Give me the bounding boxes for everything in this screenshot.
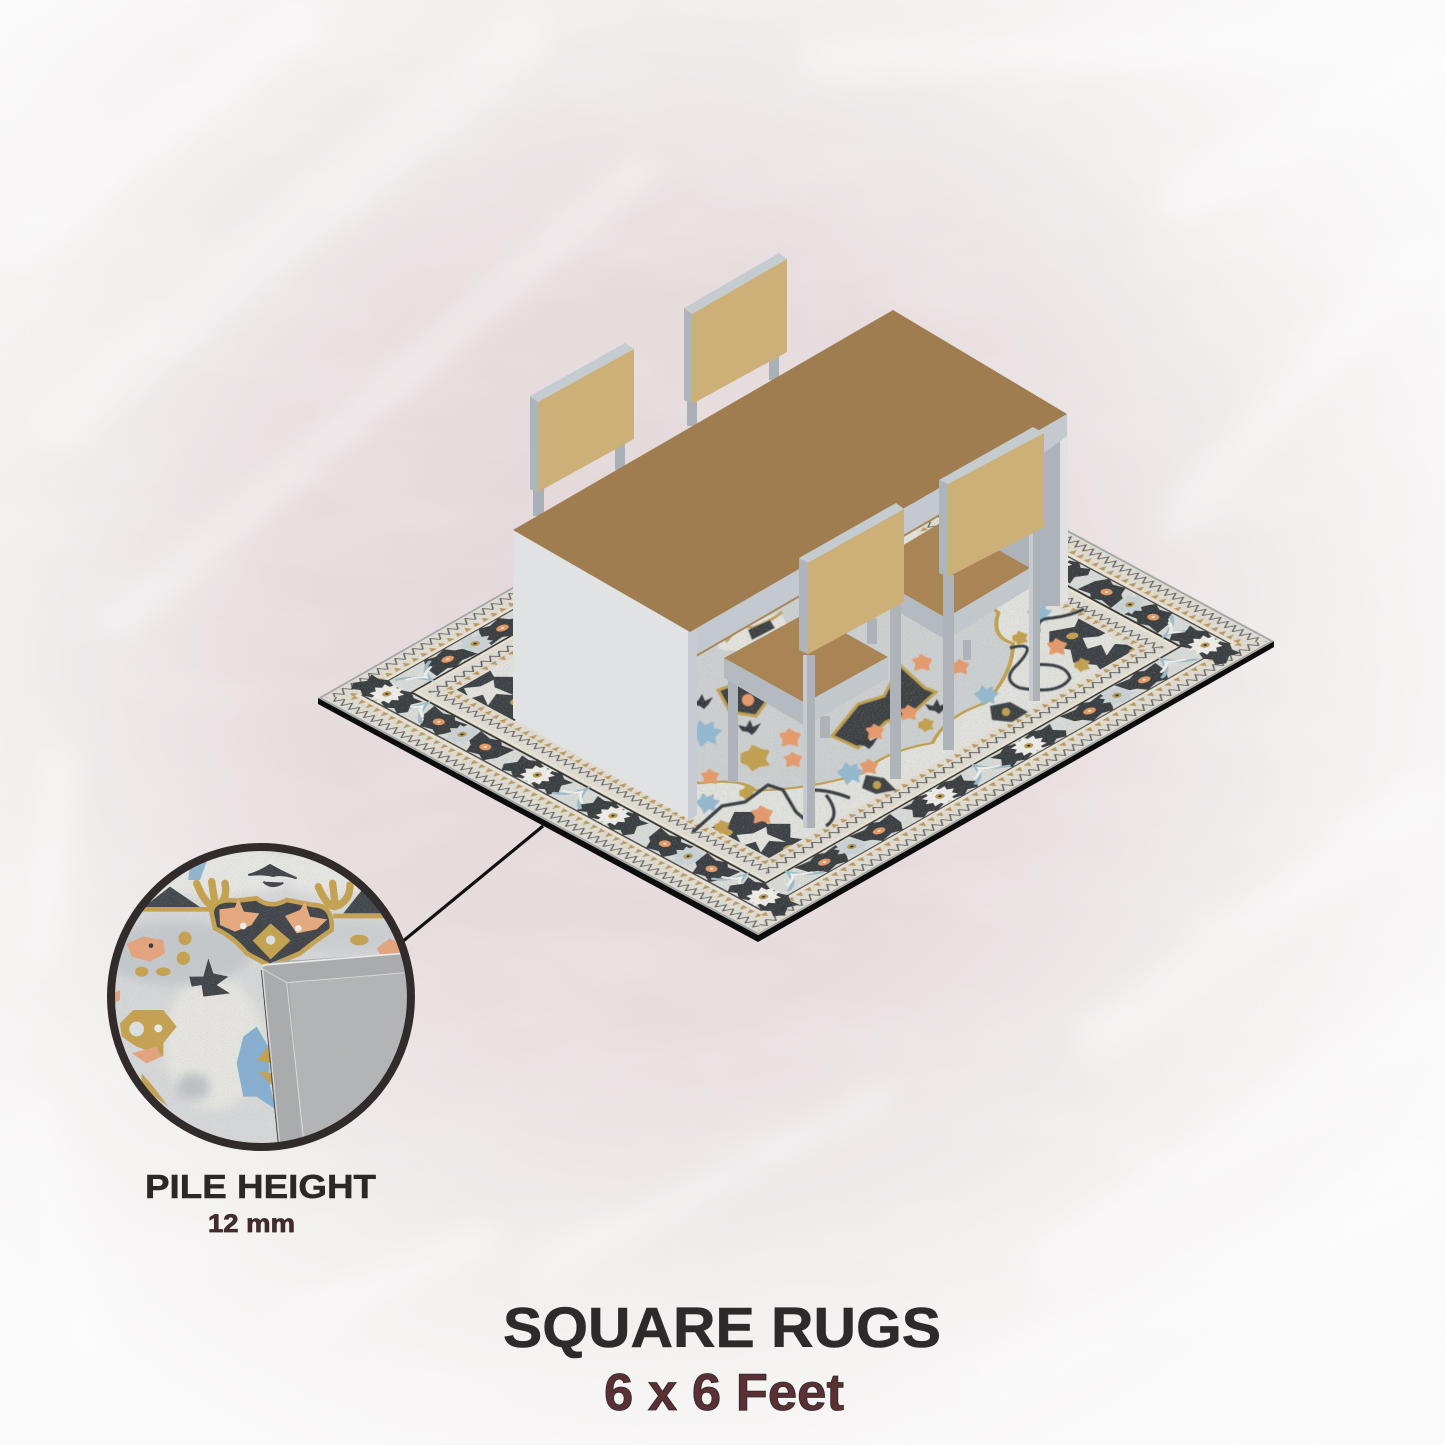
chair: back left (530, 343, 634, 516)
circle pile base (115, 852, 386, 1143)
circle florals (127, 937, 165, 962)
circle central medallion (212, 898, 332, 966)
subtitle: dimensions: 6 x 6 Feet (604, 1364, 844, 1422)
connector line from rug to detail circle (402, 826, 543, 942)
table front apron (690, 414, 1067, 655)
circle rug backing fold (262, 954, 405, 1142)
chair: front right (862, 427, 1044, 750)
circle top bird (248, 865, 297, 886)
rug thickness edge (318, 641, 1274, 942)
circle antlers (197, 882, 350, 907)
rug central field with gold outline (494, 502, 1098, 837)
detail circle: rug corner close-up (103, 843, 420, 1163)
rug corner ornaments (414, 458, 1177, 881)
circle dark outline (111, 847, 411, 1147)
rug corner stars (346, 420, 1246, 919)
table top (513, 310, 1067, 632)
rug four border sides (318, 404, 1274, 935)
chair: front left (724, 503, 904, 828)
circle mottled pile shading (118, 851, 396, 1110)
circle gold band (143, 909, 393, 916)
circle dark wedges (143, 887, 207, 912)
label: pile height: PILE HEIGHT (145, 1168, 376, 1205)
rug woven surface (318, 489, 1274, 935)
rug field florals (690, 604, 1089, 833)
table white left side panel (513, 530, 690, 820)
table far right leg (1040, 418, 1068, 606)
label: 12 mm: 12 mm (208, 1210, 295, 1238)
table: wooden dining table (513, 310, 1068, 821)
chair: back right (684, 253, 787, 426)
circle wool grain (115, 851, 404, 1143)
table front leg (688, 626, 697, 821)
title: square rugs: SQUARE RUGS (503, 1296, 941, 1360)
rug: isometric square rug (318, 489, 1274, 942)
rug wool grain (323, 520, 1268, 932)
